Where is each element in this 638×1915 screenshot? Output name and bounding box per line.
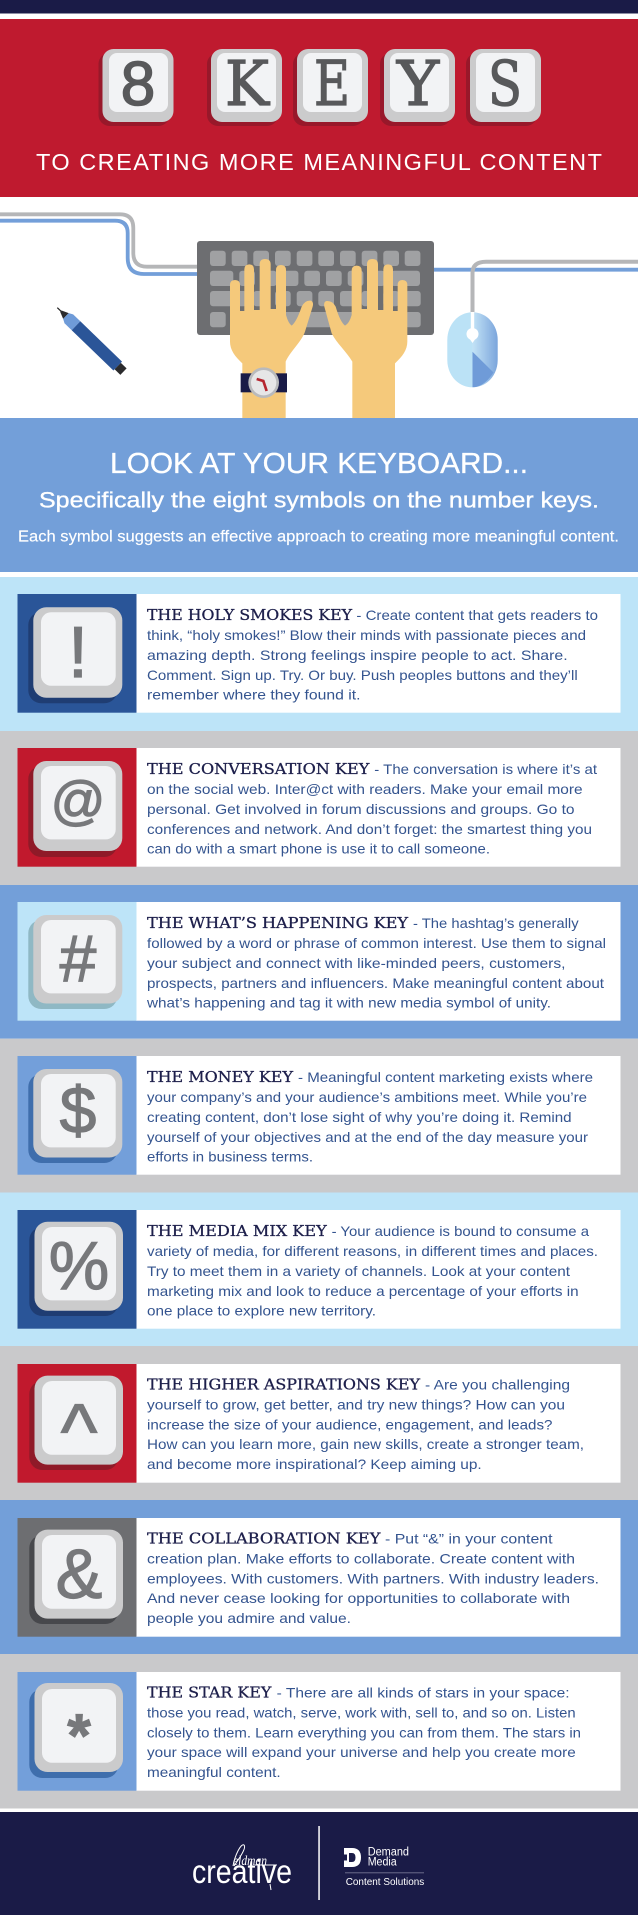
- text block: - The conversation is where it’s at: [374, 761, 597, 777]
- text block: and become more inspirational? Keep aiming up.: [147, 1456, 482, 1472]
- panel: the holy smokes key: [0, 577, 638, 731]
- text block: your space will expand your universe and help you create more: [147, 1744, 576, 1760]
- key: K: K: [225, 47, 271, 120]
- logo: feldman creative: creative: [192, 1853, 292, 1890]
- logo: demand media content solutions: Demand: [368, 1847, 409, 1859]
- text block: yourself of your objectives and at the end of the day measure your: [147, 1129, 588, 1145]
- icon: at sign key: @: [51, 771, 105, 831]
- text block: yourself to grow, get better, and try new things? How can you: [147, 1396, 565, 1412]
- text block: [147, 607, 598, 703]
- text block: [147, 1376, 584, 1472]
- panel: title banner: [0, 19, 638, 197]
- text block: - Put “&” in your content: [385, 1530, 553, 1546]
- text block: can do with a smart phone is use it to call someone.: [147, 841, 490, 857]
- pen: [53, 303, 128, 376]
- text block: your company’s and your audience’s ambitions meet. While you’re: [147, 1089, 587, 1105]
- text block: what’s happening and tag it with new media symbol of unity.: [146, 995, 551, 1011]
- key: E: E: [314, 47, 350, 120]
- text block: THE WHAT’S HAPPENING KEY: [147, 916, 408, 932]
- text block: THE MONEY KEY: [147, 1070, 293, 1086]
- subheading: Specifically the eight symbols on the number keys.: [39, 488, 599, 512]
- mouse: [447, 262, 638, 387]
- panel: the collaboration key: [0, 1500, 638, 1654]
- text block: [147, 1069, 593, 1165]
- intro sentence: Each symbol suggests an effective approach to creating more meaningful content.: [18, 528, 619, 546]
- text block: [147, 1223, 598, 1319]
- text block: [147, 1530, 599, 1626]
- panel: the star key: [0, 1654, 638, 1808]
- text block: [146, 915, 606, 1011]
- text block: Try to meet them in a variety of channels. Look at your content: [147, 1263, 570, 1279]
- text block: THE HOLY SMOKES KEY: [147, 608, 352, 624]
- key: E: [293, 47, 368, 126]
- icon: dollar key: $: [60, 1073, 96, 1147]
- panel: the money key: [0, 1039, 638, 1192]
- text block: increase the size of your audience, engagement, and leads?: [147, 1416, 553, 1432]
- icon: dollar key: [18, 1056, 136, 1175]
- text block: personal. Get involved in forum discussions and groups. Go to: [147, 801, 575, 817]
- icon: hash key: [18, 902, 136, 1021]
- text block: creation plan. Make efforts to collaborate. Create content with: [147, 1550, 575, 1566]
- subtitle: TO CREATING MORE MEANINGFUL CONTENT: [36, 149, 602, 175]
- top navy bar: [0, 0, 638, 14]
- text block: - The hashtag’s generally: [413, 915, 579, 931]
- text block: THE HIGHER ASPIRATIONS KEY: [147, 1378, 420, 1394]
- text block: marketing mix and look to reduce a percentage of your efforts in: [147, 1283, 579, 1299]
- key: Y: Y: [396, 47, 440, 120]
- key: S: [466, 47, 541, 126]
- icon: ampersand key: [18, 1518, 136, 1637]
- icon: at sign key: [18, 748, 136, 867]
- icon: asterisk key: [18, 1672, 136, 1791]
- logo: demand media content solutions: [344, 1847, 424, 1888]
- text block: efforts in business terms.: [147, 1149, 313, 1165]
- illustration: desk with keyboard, hands, pen and mouse: [0, 214, 638, 418]
- panel: the media mix key: [0, 1192, 638, 1346]
- text block: And never cease looking for opportunities to collaborate with: [147, 1590, 570, 1606]
- text block: variety of media, for different reasons, in different times and places.: [147, 1243, 598, 1259]
- heading: LOOK AT YOUR KEYBOARD...: [110, 448, 528, 480]
- key: 8: 8: [121, 50, 155, 119]
- text block: remember where they found it.: [147, 687, 360, 703]
- icon: percent key: %: [49, 1228, 109, 1304]
- key: K: [207, 47, 282, 126]
- text block: - Meaningful content marketing exists where: [298, 1069, 593, 1085]
- icon: caret key: [18, 1364, 136, 1483]
- text block: [147, 1684, 581, 1780]
- text block: one place to explore new territory.: [147, 1303, 376, 1319]
- cables: keyboard: [0, 214, 638, 274]
- panel: the higher aspirations key: [0, 1346, 638, 1500]
- text block: prospects, partners and influencers. Make meaningful content about: [147, 975, 604, 991]
- key: S: S: [488, 47, 522, 120]
- icon: exclamation key: !: [68, 613, 88, 693]
- text block: amazing depth. Strong feelings inspire people to act. Share.: [147, 647, 568, 663]
- text block: think, “holy smokes!” Blow their minds with passionate pieces and: [147, 627, 586, 643]
- text block: Comment. Sign up. Try. Or buy. Push peoples buttons and they’ll: [147, 667, 578, 683]
- logo: demand media content solutions: Content Solutions: [346, 1876, 424, 1888]
- text block: THE STAR KEY: [147, 1686, 272, 1702]
- text block: THE MEDIA MIX KEY: [147, 1224, 327, 1240]
- text block: followed by a word or phrase of common interest. Use them to signal: [147, 935, 606, 951]
- text block: THE CONVERSATION KEY: [147, 762, 370, 778]
- footer: [0, 1812, 638, 1915]
- divider: [318, 1826, 320, 1900]
- icon: asterisk key: *: [67, 1702, 91, 1769]
- text block: meaningful content.: [147, 1764, 281, 1780]
- icon: hash key: #: [60, 921, 97, 995]
- text block: people you admire and value.: [147, 1610, 351, 1626]
- logo: demand media content solutions: Media: [368, 1857, 397, 1869]
- text block: those you read, watch, serve, work with, sell to, and so on. Listen: [147, 1704, 576, 1720]
- text block: employees. With customers. With partners. With industry leaders.: [147, 1570, 599, 1586]
- text block: closely to them. Learn everything you can from them. The stars in: [147, 1724, 581, 1740]
- icon: exclamation key: [18, 594, 136, 713]
- text block: How can you learn more, gain new skills, create a stronger team,: [147, 1436, 584, 1452]
- text block: on the social web. Inter@ct with readers. Make your email more: [147, 781, 583, 797]
- text block: [147, 761, 597, 857]
- icon: caret key: ^: [61, 1387, 98, 1475]
- key: 8: [98, 49, 174, 126]
- icon: percent key: [18, 1210, 136, 1329]
- text block: conferences and network. And don’t forget: the smartest thing you: [147, 821, 592, 837]
- text block: your subject and connect with like-minded peers, customers,: [147, 955, 566, 971]
- text block: THE COLLABORATION KEY: [147, 1532, 381, 1548]
- text block: - There are all kinds of stars in your space:: [277, 1684, 570, 1700]
- text block: - Are you challenging: [425, 1376, 570, 1392]
- hands: [230, 259, 407, 418]
- key: Y: [380, 47, 455, 126]
- icon: ampersand key: &: [56, 1535, 102, 1613]
- panel: the what's happening key: [0, 885, 638, 1039]
- panel: the conversation key: [0, 731, 638, 885]
- wristwatch: [241, 367, 287, 398]
- text block: creating content, don’t lose sight of why you’re doing it. Remind: [147, 1109, 572, 1125]
- logo: feldman creative: eldman: [233, 1854, 267, 1869]
- text block: - Create content that gets readers to: [356, 607, 598, 623]
- panel: look at your keyboard: [0, 418, 638, 572]
- keyboard: [197, 241, 434, 335]
- text block: - Your audience is bound to consume a: [332, 1223, 589, 1239]
